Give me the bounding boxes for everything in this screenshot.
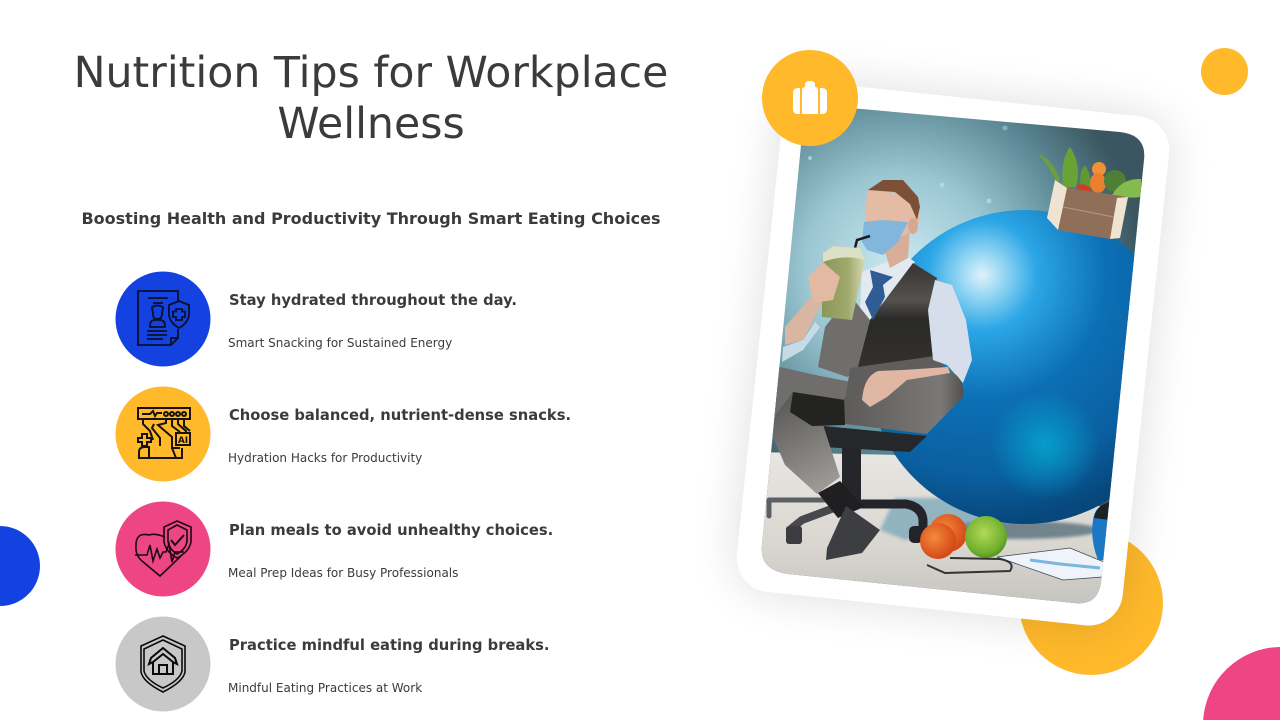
title: Nutrition Tips for Workplace <box>74 48 668 98</box>
straw <box>855 236 870 248</box>
chair feet <box>786 526 802 544</box>
neck <box>885 228 910 268</box>
tip 1 description: Smart Snacking for Sustained Energy <box>228 336 452 350</box>
hand holding jar <box>808 262 840 303</box>
face mask <box>862 220 908 255</box>
left sleeve cuff <box>782 322 820 362</box>
tip 4 heading: Practice mindful eating during breaks. <box>229 637 550 654</box>
hand on knee <box>862 367 950 407</box>
chair base <box>769 500 923 532</box>
left forearm and sleeve <box>785 298 822 345</box>
tip 3 description: Meal Prep Ideas for Busy Professionals <box>228 566 458 580</box>
tip 3 heading: Plan meals to avoid unhealthy choices. <box>229 522 553 539</box>
dark under thigh <box>790 392 845 426</box>
icon: bag <box>793 81 827 114</box>
shirt body <box>860 255 915 322</box>
decorative circle: pink bottom right <box>1203 647 1280 720</box>
tomatoes <box>929 514 967 552</box>
title: Wellness <box>277 99 465 149</box>
icon circle 2: yellow AI robotic circuitry <box>116 386 210 482</box>
icon circle 1: blue document with shield <box>116 272 210 366</box>
tip 1 heading: Stay hydrated throughout the day. <box>229 292 517 309</box>
green apple <box>965 516 1007 558</box>
icon circle 3: pink heart with shield <box>116 502 210 596</box>
icon circle 2: yellow AI robotic circuitry: AI <box>178 436 188 446</box>
decorative circle: blue left <box>0 526 40 606</box>
clipboard <box>997 548 1104 580</box>
face <box>865 190 920 235</box>
decorative circle: yellow top right <box>1201 48 1248 95</box>
sock <box>818 481 864 518</box>
bent leg <box>844 369 963 434</box>
glasses <box>927 558 1012 573</box>
chair seat <box>824 426 927 452</box>
tie <box>865 270 893 320</box>
thigh <box>774 367 848 416</box>
title <box>74 48 668 149</box>
smoothie jar <box>822 246 865 320</box>
vest left panel <box>818 295 870 377</box>
icon circle 4: gray shield with house <box>116 616 210 712</box>
floor <box>750 452 1115 610</box>
badge: yellow circle with bag icon <box>762 50 858 146</box>
ball shadow <box>930 521 1100 539</box>
produce box <box>1037 147 1141 239</box>
exercise ball <box>880 210 1134 524</box>
tip 2 description: Hydration Hacks for Productivity <box>228 451 422 465</box>
blue bottle <box>1092 502 1110 560</box>
shirt sleeve right <box>928 280 972 383</box>
lap fill between vest and leg <box>846 356 946 398</box>
decorative circle: yellow large behind card <box>1019 531 1163 675</box>
lower leg <box>770 385 840 494</box>
tip 4 description: Mindful Eating Practices at Work <box>228 681 422 695</box>
ear <box>908 218 918 234</box>
photo: man with smoothie on chair beside exercise ball <box>762 108 1144 604</box>
photo card <box>733 79 1182 629</box>
tip 2 heading: Choose balanced, nutrient-dense snacks. <box>229 407 571 424</box>
subtitle: Boosting Health and Productivity Through Smart Eating Choices <box>81 209 661 228</box>
shoe <box>826 506 880 560</box>
hair <box>868 180 920 220</box>
vest right panel <box>857 263 937 370</box>
chair stem <box>842 448 861 504</box>
